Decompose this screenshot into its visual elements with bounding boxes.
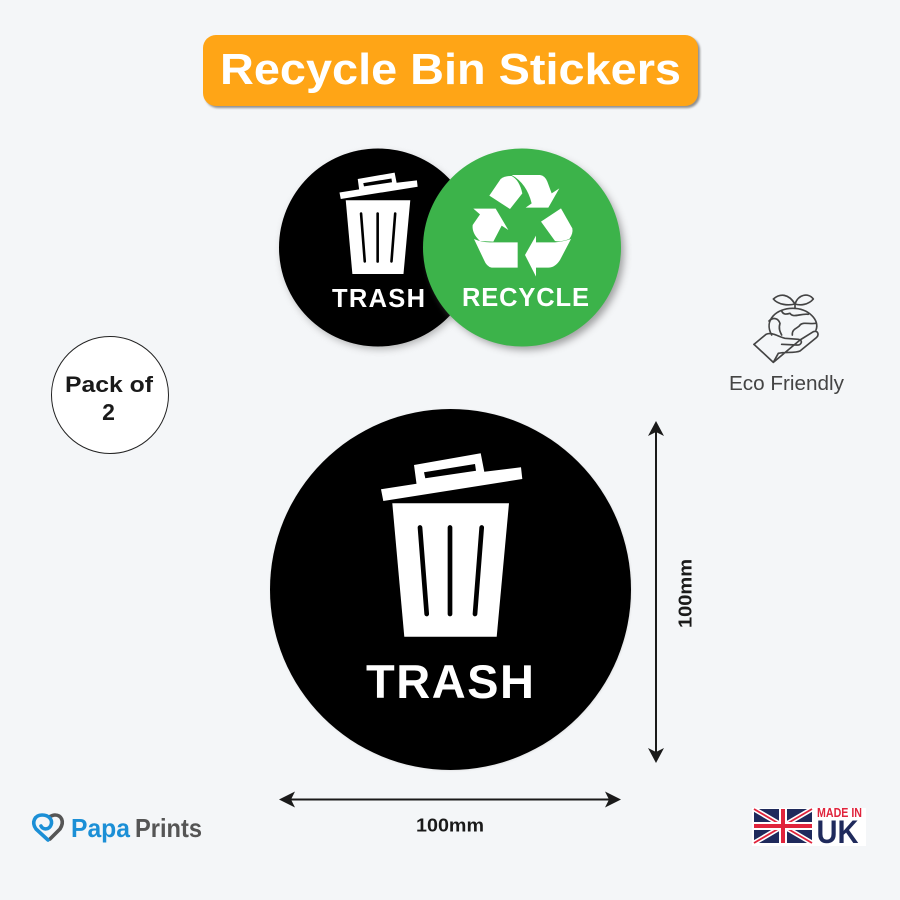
pack of 2 badge: Pack of — [65, 372, 154, 397]
height dimension arrow — [648, 421, 664, 763]
made in uk badge — [752, 806, 866, 850]
icon: heart logo — [34, 815, 62, 840]
icon: large trash bin — [381, 453, 522, 637]
eco friendly badge — [729, 295, 844, 395]
width label: 100mm — [416, 816, 484, 836]
papa prints logo — [34, 813, 202, 843]
icon: small trash bin — [339, 173, 418, 274]
title banner — [203, 35, 700, 108]
large trash sticker — [270, 409, 632, 770]
small trash label: TRASH — [332, 285, 425, 313]
logo wordmark: Papa — [71, 813, 131, 843]
small trash sticker — [279, 148, 478, 349]
title text: Recycle Bin Stickers — [220, 45, 681, 94]
uk text: UK — [816, 814, 858, 850]
height label: 100mm — [676, 559, 696, 628]
icon: globe with sprout in a hand — [754, 295, 818, 362]
made in text: MADE IN — [817, 806, 862, 820]
pack of 2 badge — [52, 336, 168, 454]
papa prints logo: Prints — [135, 813, 202, 843]
small recycle sticker — [423, 148, 624, 350]
large trash label: TRASH — [366, 655, 534, 708]
recycle label: RECYCLE — [462, 284, 589, 312]
width dimension arrow — [279, 792, 621, 808]
eco friendly label: Eco Friendly — [729, 373, 844, 395]
icon: recycle arrows — [473, 175, 573, 277]
pack of 2 badge: 2 — [102, 399, 115, 425]
icon: union flag — [754, 809, 812, 843]
